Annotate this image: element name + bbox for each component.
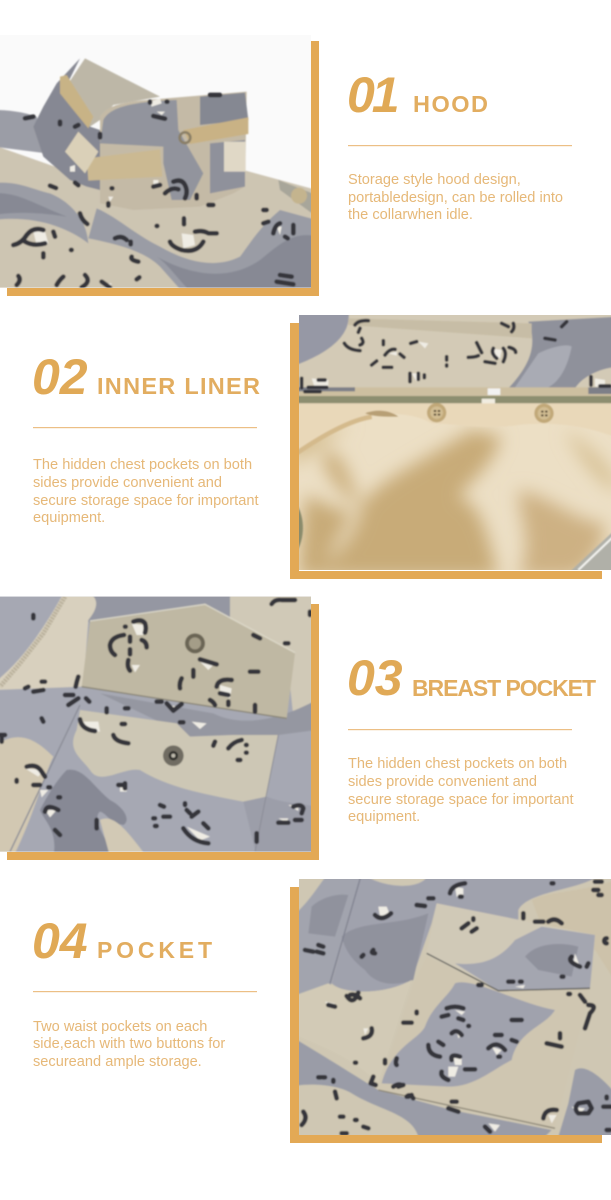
title breast pocket: BREAST POCKET <box>412 675 596 701</box>
title inner liner: INNER LINER <box>97 373 260 399</box>
photo: waist pocket <box>292 873 611 1140</box>
photo: fleece liner <box>292 310 611 577</box>
heading: 01 hood <box>347 67 488 123</box>
description: hood: portabledesign, can be rolled into <box>348 190 563 206</box>
description: inner liner <box>33 457 259 526</box>
title pocket: POCKET <box>97 937 212 963</box>
description: inner liner: sides provide convenient and <box>33 475 222 491</box>
description: pocket: side,each with two buttons for <box>33 1036 225 1052</box>
description: hood: the collarwhen idle. <box>348 207 473 223</box>
panel: 04 pocket <box>32 873 611 1143</box>
number 02: 02 <box>32 349 88 405</box>
description: pocket <box>33 1019 225 1070</box>
panel: 03 breast pocket <box>0 590 596 860</box>
frame: breast pocket photo <box>7 604 319 860</box>
panel: 02 inner liner <box>32 310 611 579</box>
number 03: 03 <box>347 650 403 706</box>
description: inner liner: secure storage space for important <box>33 493 259 509</box>
description: breast pocket: sides provide convenient and <box>348 774 537 790</box>
description: breast pocket: equipment. <box>348 809 420 825</box>
description: pocket: Two waist pockets on each <box>33 1019 207 1035</box>
frame: liner photo <box>290 323 602 579</box>
frame: hood photo <box>7 41 319 296</box>
description: inner liner: The hidden chest pockets on both <box>33 457 252 473</box>
photo: breast pocket <box>0 590 320 857</box>
description: breast pocket: secure storage space for important <box>348 792 574 808</box>
description: inner liner: equipment. <box>33 510 105 526</box>
panel: 01 hood <box>0 35 572 297</box>
description: breast pocket <box>348 756 574 825</box>
description: hood: Storage style hood design, <box>348 172 521 188</box>
description: breast pocket: The hidden chest pockets on both <box>348 756 567 772</box>
photo: hood collar <box>0 58 311 288</box>
number 04: 04 <box>32 913 88 969</box>
description: pocket: secureand ample storage. <box>33 1054 202 1070</box>
number 01: 01 <box>347 67 398 123</box>
description: hood <box>348 172 563 223</box>
frame: pocket photo <box>290 887 602 1143</box>
title hood: HOOD <box>413 91 488 117</box>
heading: 03 breast pocket <box>347 650 596 706</box>
heading: 04 pocket <box>32 913 212 969</box>
heading: 02 inner liner <box>32 349 260 405</box>
